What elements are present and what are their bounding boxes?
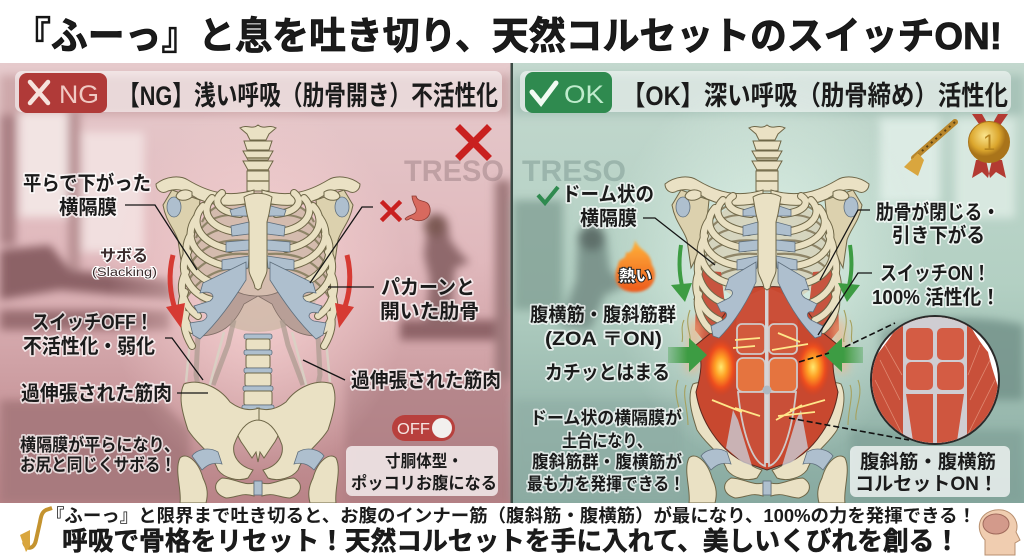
label: transverse abdominis: (ZOA 〒ON) bbox=[545, 329, 662, 350]
footer line one: 『ふーっ』と限界まで吐き切ると、お腹のインナー筋（腹斜筋・腹横筋）が最になり、100%の力を発揮できる！ bbox=[46, 505, 976, 526]
energy sparks bbox=[712, 333, 825, 420]
icon: gold medal: 1 bbox=[983, 130, 995, 155]
label: slacking: (Slacking) bbox=[92, 267, 157, 279]
OK panel background gym scene bbox=[513, 63, 1024, 503]
text block: NG note: お尻と同じくサボる！ bbox=[20, 455, 176, 475]
footer line two: 呼吸で骨格をリセット！天然コルセットを手に入れて、美しいくびれを創る！ bbox=[62, 526, 960, 556]
label: slacking: サボる bbox=[100, 247, 148, 265]
NG panel background gym scene bbox=[0, 63, 511, 503]
label: flat diaphragm bbox=[23, 171, 151, 219]
footer bbox=[0, 503, 1024, 559]
red arrow right bbox=[335, 255, 354, 328]
abdominal muscle group bbox=[692, 287, 842, 470]
label: flared ribs: 開いた肋骨 bbox=[380, 300, 479, 323]
NG header bar bbox=[15, 71, 502, 113]
text block: OK note: 最も力を発揮できる！ bbox=[527, 474, 685, 494]
OK skeleton back layer bbox=[665, 125, 869, 503]
label: switch off: 不活性化・弱化 bbox=[23, 335, 155, 358]
icons: sway lines beside waist bbox=[676, 310, 860, 425]
label: ribs close: 引き下がる bbox=[892, 223, 985, 247]
icon: gold medal bbox=[968, 114, 1010, 178]
icon: head with brain bbox=[979, 510, 1020, 555]
title: 『ふーっ』と息を吐き切り、天然コルセットのスイッチON! bbox=[14, 16, 1002, 58]
inset: muscle zoom lens bbox=[868, 316, 1000, 448]
label: switch off bbox=[23, 312, 155, 358]
text block: OK note: 土台になり、 bbox=[562, 431, 652, 451]
callout: NG result: 寸胴体型・ bbox=[385, 452, 463, 471]
green down arrows bbox=[671, 245, 860, 302]
transverse glow left bbox=[704, 338, 738, 396]
label: dome diaphragm: 横隔膜 bbox=[580, 207, 637, 230]
warm halo around waist bbox=[692, 320, 842, 372]
label: switch on: スイッチON！ bbox=[880, 263, 990, 285]
text block: OK note: 腹斜筋群・腹横筋が bbox=[532, 452, 682, 472]
panel: NG shallow breathing bbox=[0, 63, 511, 503]
red arrow left bbox=[166, 255, 185, 328]
callout: NG result bbox=[346, 446, 498, 496]
icon: check mark bbox=[538, 187, 558, 203]
label: transverse abdominis bbox=[530, 304, 676, 350]
NG skeleton bbox=[156, 125, 360, 503]
callout: OK result bbox=[850, 446, 1010, 497]
leader lines NG bbox=[125, 205, 374, 393]
label: switch on: 100% 活性化！ bbox=[872, 286, 1000, 309]
icon: small cross and upset stomach bbox=[383, 196, 430, 221]
NG badge: NG bbox=[59, 81, 99, 109]
rectus abdominis blocks bbox=[737, 324, 797, 466]
off toggle bbox=[392, 415, 455, 441]
label: overstretched muscle right: 過伸張された筋肉 bbox=[351, 369, 501, 392]
icon: hot flame: 熱い bbox=[619, 267, 652, 285]
label: flared ribs: パカーンと bbox=[381, 276, 475, 299]
text block: OK note: ドーム状の横隔膜が bbox=[530, 408, 682, 428]
label: flat diaphragm: 横隔膜 bbox=[59, 196, 117, 219]
callout: NG result: ポッコリお腹になる bbox=[351, 473, 497, 493]
label: dome diaphragm bbox=[562, 183, 654, 230]
leader lines OK bbox=[643, 210, 872, 335]
label: dome diaphragm: ドーム状の bbox=[562, 183, 654, 206]
dashed connectors bbox=[789, 323, 909, 440]
text block: NG note: 横隔膜が平らになり、 bbox=[20, 435, 180, 455]
label: flat diaphragm: 平らで下がった bbox=[23, 171, 151, 195]
divider between panels bbox=[510, 63, 513, 503]
callout: OK result: コルセットON！ bbox=[855, 474, 998, 495]
off toggle: OFF bbox=[397, 421, 430, 438]
label: transverse abdominis: 腹横筋・腹斜筋群 bbox=[530, 304, 676, 326]
icon: saxophone bbox=[20, 508, 52, 552]
label: click into place: カチッとはまる bbox=[545, 362, 670, 384]
icon: big red cross bbox=[460, 129, 487, 156]
NG header text: 【NG】浅い呼吸（肋骨開き）不活性化 bbox=[118, 81, 498, 111]
transverse glow right bbox=[796, 338, 830, 396]
label: switch on bbox=[872, 263, 1000, 309]
label: ribs close: 肋骨が閉じる・ bbox=[876, 200, 1000, 224]
OK header bar bbox=[520, 71, 1011, 113]
label: overstretched muscle left: 過伸張された筋肉 bbox=[21, 382, 172, 405]
icon: hot flame bbox=[615, 240, 655, 292]
callout: OK result: 腹斜筋・腹横筋 bbox=[860, 451, 996, 473]
watermark TRESO right: TRESO bbox=[522, 155, 626, 188]
text block: NG note bbox=[20, 435, 180, 475]
NG badge bbox=[19, 73, 107, 113]
watermark TRESO left: TRESO bbox=[404, 155, 504, 188]
icon: clarinet bbox=[904, 122, 955, 176]
label: flared ribs bbox=[380, 276, 479, 323]
text block: OK note bbox=[527, 408, 685, 494]
label: switch off: スイッチOFF！ bbox=[32, 312, 153, 334]
panel: OK deep breathing bbox=[513, 63, 1024, 503]
OK ribs front layer bbox=[696, 193, 838, 338]
OK badge: OK bbox=[564, 81, 604, 109]
label: ribs close bbox=[876, 200, 1000, 247]
label: slacking bbox=[92, 247, 157, 279]
green side arrows pointing inward bbox=[668, 338, 863, 372]
OK badge bbox=[525, 72, 612, 113]
